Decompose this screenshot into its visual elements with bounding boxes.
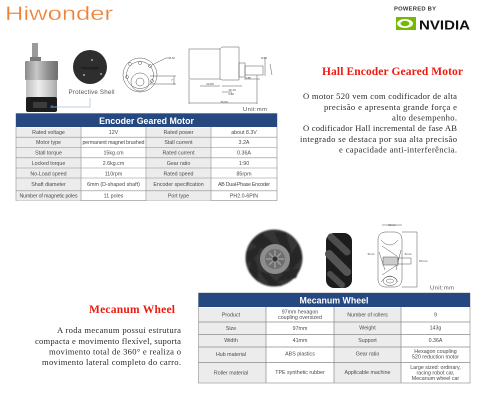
text: hall encoder description: alto desempenho. <box>392 112 457 122</box>
table: mecanum wheel: Hexagon coupling <box>414 349 457 355</box>
table: encoder geared motor <box>16 114 277 200</box>
table: encoder geared motor: 3.2A <box>239 140 250 146</box>
photo: mecanum wheel front <box>246 230 302 286</box>
diagram: motor front view: 6-M <box>169 56 175 60</box>
diagram: motor side view with dimensions <box>189 47 272 113</box>
table: mecanum wheel: 9 <box>434 312 437 318</box>
table: encoder geared motor: 6mm (D-shaped shaft) <box>87 182 140 188</box>
table: encoder geared motor: Gear ratio <box>167 161 190 167</box>
table: encoder geared motor: permanent magnet brushed <box>82 140 145 146</box>
diagram: motor side view with dimensions: Unit:mm <box>243 107 267 113</box>
logo: powered by NVIDIA: NVIDIA <box>419 18 471 32</box>
table: encoder geared motor: Locked torque <box>32 161 65 167</box>
text: hall encoder description: precisão e apresenta grande força e <box>324 102 457 112</box>
table: mecanum wheel: Hub material <box>216 352 246 358</box>
diagram: motor side view with dimensions: 76.50 <box>220 100 228 104</box>
table: encoder geared motor: 2.6kg.cm <box>103 161 125 167</box>
table: mecanum wheel: Gear ratio <box>356 352 379 358</box>
table: mecanum wheel: 97mm <box>293 326 308 332</box>
text: hall encoder description: O motor 520 vem com codificador de alta <box>303 91 457 101</box>
icon: protective shell: Protective Shell <box>68 89 114 96</box>
diagram: mecanum wheel dimensions: 97mm <box>419 259 428 263</box>
table: encoder geared motor: 11 poles <box>104 193 124 199</box>
table: encoder geared motor: Number of magnetic poles <box>20 193 78 199</box>
table: mecanum wheel: Large sized: ordinary, <box>410 365 461 371</box>
text: mecanum wheel description: A roda mecanum possui estrutura <box>57 325 181 335</box>
table: encoder geared motor: Port type <box>168 193 189 199</box>
table: encoder geared motor: Stall torque <box>35 150 62 156</box>
table: encoder geared motor: 1:90 <box>239 161 249 167</box>
diagram: mecanum wheel dimensions: Unit:mm <box>430 286 454 292</box>
logo: powered by NVIDIA <box>394 6 471 32</box>
table: encoder geared motor: Motor type <box>36 140 61 146</box>
text: hall encoder description: e capacidade anti-interferência. <box>339 144 457 154</box>
table: mecanum wheel: Support <box>358 338 377 344</box>
table: encoder geared motor: AB Dual-Phase Encoder <box>218 182 270 188</box>
heading: mecanum wheel: Mecanum Wheel <box>89 304 175 316</box>
table: mecanum wheel: Size <box>226 326 236 332</box>
diagram: mecanum wheel dimensions: 6mm <box>405 252 412 256</box>
table: encoder geared motor: Encoder specification <box>153 182 204 188</box>
table: encoder geared motor: Rated power <box>163 130 194 136</box>
table: mecanum wheel: Product <box>222 312 241 318</box>
table: encoder geared motor: Rated voltage <box>32 130 65 136</box>
table: mecanum wheel: 41mm <box>293 338 308 344</box>
diagram: mecanum wheel dimensions <box>368 223 454 292</box>
table: mecanum wheel: ABS plastics <box>285 352 315 358</box>
diagram: motor side view with dimensions: 3.80 <box>228 92 234 96</box>
table: encoder geared motor: 0.36A <box>237 150 251 156</box>
table: mecanum wheel <box>198 293 470 383</box>
diagram: motor front view <box>123 56 176 92</box>
diagram: motor side view with dimensions: 16.10 <box>228 88 236 92</box>
table: encoder geared motor: Rated speed <box>163 171 194 177</box>
table: mecanum wheel: 0.36A <box>429 338 443 344</box>
table: encoder geared motor: Rated current <box>162 150 195 156</box>
table: encoder geared motor: Stall current <box>164 140 193 146</box>
table: mecanum wheel: TPE synthetic rubber <box>275 370 325 376</box>
heading: hall encoder geared motor: Hall Encoder Geared Motor <box>322 66 463 78</box>
table: mecanum wheel: Mecanum Wheel <box>300 296 368 306</box>
diagram: motor front view: 7 <box>171 78 173 82</box>
diagram: mecanum wheel dimensions: 41mm <box>388 223 397 227</box>
table: mecanum wheel: racing robot car, <box>417 370 454 376</box>
diagram: motor side view with dimensions: 8.00 <box>261 56 267 60</box>
table: encoder geared motor: 12V <box>109 130 119 136</box>
logo: Hiwonder: Hiwonder <box>5 3 114 25</box>
table: mecanum wheel: 97mm hexagon <box>282 310 318 316</box>
diagram: mecanum wheel dimensions: 5mm <box>368 252 375 256</box>
table: encoder geared motor: No-Load speed <box>30 171 67 177</box>
table: mecanum wheel: 143g <box>430 326 441 332</box>
diagram: motor side view with dimensions: 8.80 <box>245 76 251 80</box>
table: encoder geared motor: PH2.0-6PIN <box>230 193 258 199</box>
table: encoder geared motor: Encoder Geared Motor <box>99 116 194 126</box>
table: mecanum wheel: Weight <box>359 326 376 332</box>
text: mecanum wheel description: movimento total de 360° e realiza o <box>49 346 181 356</box>
table: encoder geared motor: about 8.3V <box>231 130 257 136</box>
icon: protective shell <box>68 50 114 96</box>
table: mecanum wheel: Roller material <box>214 370 248 376</box>
table: mecanum wheel: Number of rollers <box>347 312 388 318</box>
text: mecanum wheel description: compacta e movimento flexível, suporta <box>35 336 181 346</box>
table: encoder geared motor: 110rpm <box>105 171 123 177</box>
table: mecanum wheel: Applicable machine <box>345 370 391 376</box>
text: hall encoder description <box>300 91 457 154</box>
table: mecanum wheel: 520 reduction motor <box>412 354 459 360</box>
table: encoder geared motor: 15kg.cm <box>103 150 124 156</box>
text: mecanum wheel description <box>35 325 181 367</box>
photo: encoder geared motor <box>25 43 90 112</box>
photo: mecanum wheel side <box>326 233 352 288</box>
table: encoder geared motor: Shaft diameter <box>31 182 66 188</box>
diagram: motor side view with dimensions: 22.80 <box>206 82 214 86</box>
text: hall encoder description: O codificador Hall incremental de fase AB <box>303 123 457 133</box>
logo: powered by NVIDIA: POWERED BY <box>394 6 436 12</box>
table: mecanum wheel: coupling oversized <box>278 315 322 321</box>
table: mecanum wheel: Width <box>224 338 238 344</box>
table: mecanum wheel: Mecanum wheel car <box>412 376 459 382</box>
table: encoder geared motor: 85rpm <box>236 171 252 177</box>
text: hall encoder description: integrado se destaca por sua alta precisão <box>300 134 457 144</box>
icon: protective shell: Hiwonder <box>80 66 100 70</box>
text: mecanum wheel description: movimento lateral completo do carro. <box>42 357 181 367</box>
